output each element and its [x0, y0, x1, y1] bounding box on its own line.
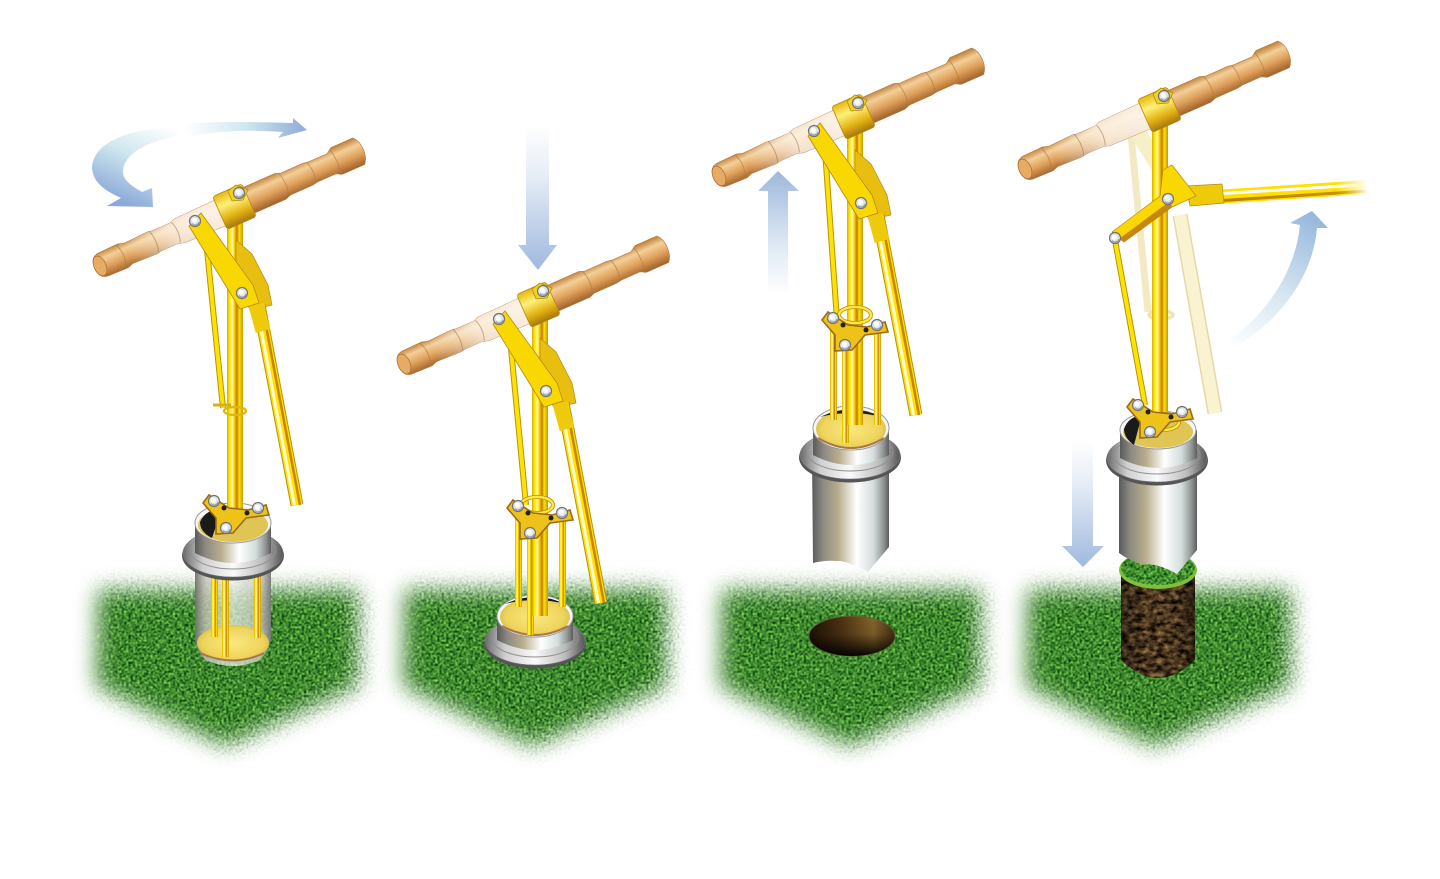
rods	[830, 325, 881, 443]
raised lever	[1110, 165, 1368, 244]
panel: step 3 lift cutter out	[706, 43, 990, 746]
soil plug	[1121, 575, 1195, 678]
cutter rim and flange	[799, 406, 901, 482]
panel: step 2 press down	[391, 125, 675, 746]
clamp ring	[839, 307, 871, 323]
cutter rim and flange	[1106, 411, 1208, 486]
spider plate	[822, 312, 888, 351]
arrow: plug pushed down	[1062, 440, 1104, 567]
flange at ground	[484, 595, 586, 668]
grass patch 4	[1026, 590, 1290, 746]
panel: step 4 eject plug	[1012, 36, 1368, 746]
cutter body	[812, 455, 889, 572]
arrow: press down	[518, 125, 557, 270]
arrow: curved turn left	[92, 127, 180, 207]
handle T-bar	[87, 133, 371, 285]
spider plate	[203, 495, 269, 534]
thin rod	[206, 240, 246, 415]
thin rod	[825, 150, 837, 320]
turf disc on plug	[1119, 551, 1197, 589]
thin rod	[1115, 240, 1145, 405]
grass patch 3	[720, 590, 980, 746]
arrow: curved turn right	[182, 118, 307, 138]
spider plate	[507, 500, 573, 539]
shaft	[532, 313, 548, 616]
cutter body	[1119, 458, 1197, 574]
cutter body, glass view	[195, 520, 271, 666]
shaft	[1152, 118, 1168, 423]
T-bar	[1012, 36, 1296, 188]
T-bar and lever	[391, 231, 675, 603]
shaft	[227, 215, 243, 510]
rods	[515, 515, 566, 635]
clamp ring	[521, 497, 553, 513]
grass patch 1	[96, 590, 358, 746]
T-bar and lever	[706, 43, 990, 415]
cut hole	[809, 616, 895, 656]
thin rod	[510, 338, 526, 505]
grass patch 2	[403, 590, 666, 746]
arrow: lever swing up	[1222, 211, 1328, 350]
spider plate	[1127, 399, 1193, 438]
ghost lever previous position	[1130, 120, 1215, 413]
clamp ring	[1147, 414, 1179, 430]
cutter rim and flange	[182, 503, 284, 580]
panel: step 1 turn handle and insert cutter	[87, 118, 371, 746]
shaft	[847, 125, 863, 425]
lever	[189, 213, 300, 505]
arrow: lift up	[758, 171, 799, 295]
